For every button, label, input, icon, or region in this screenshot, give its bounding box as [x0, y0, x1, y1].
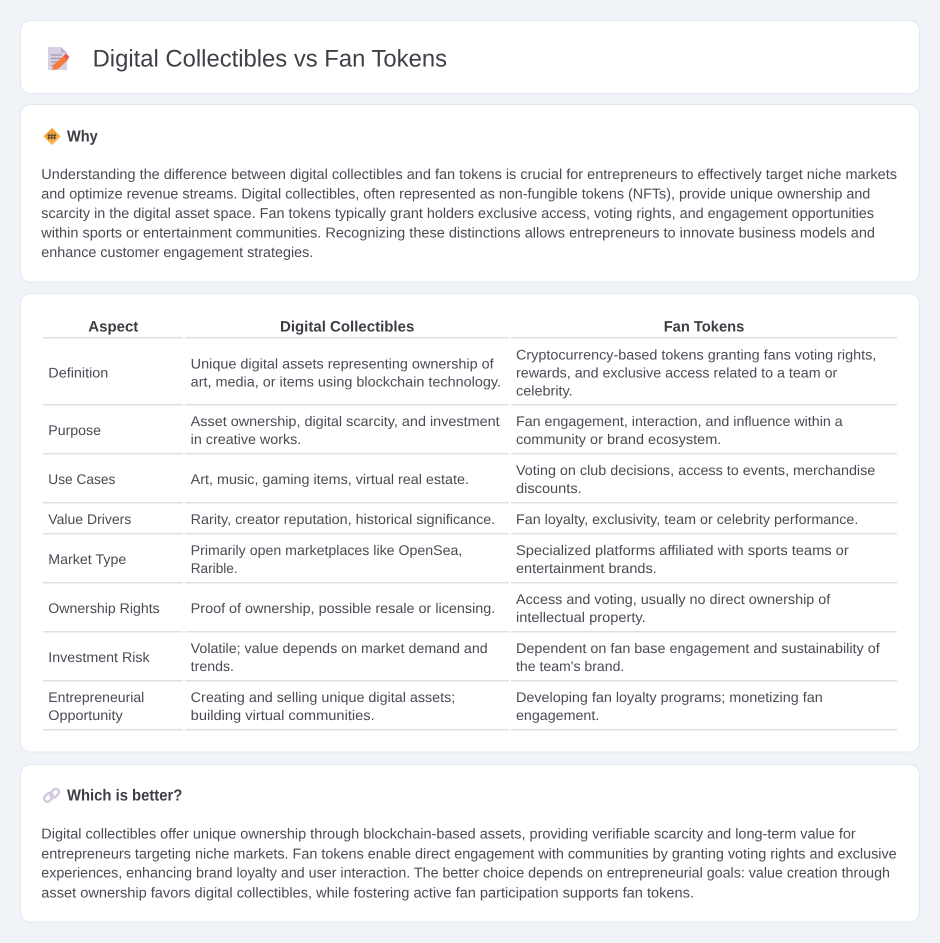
- row: market type: Rarible.: [191, 560, 238, 576]
- row: use cases: [43, 462, 897, 504]
- row: market type: entertainment brands.: [516, 560, 657, 576]
- row: market type: Primarily open marketplaces like OpenSea,: [191, 542, 462, 558]
- row: investment risk: Investment Risk: [48, 649, 151, 665]
- row: market type: Market Type: [48, 551, 127, 567]
- panel: header: [20, 20, 920, 94]
- text block: which is better paragraph: Digital collectibles offer unique ownership through blockchain-based assets, providing verifiable scarcity and long-term value for: [41, 826, 856, 842]
- row: use cases: Voting on club decisions, access to events, merchandise: [516, 462, 876, 478]
- row: ownership rights: Proof of ownership, possible resale or licensing.: [191, 600, 495, 616]
- row: definition: Definition: [48, 364, 108, 380]
- panel: which is better: [20, 764, 920, 922]
- text block: why paragraph: [40, 167, 897, 261]
- row: purpose: [43, 413, 897, 454]
- row: purpose: Asset ownership, digital scarcity, and investment: [191, 413, 500, 429]
- row: entrepreneurial opportunity: Developing fan loyalty programs; monetizing fan: [516, 689, 823, 705]
- row: purpose: in creative works.: [191, 431, 301, 447]
- panel: why: [20, 104, 920, 282]
- row: investment risk: Dependent on fan base engagement and sustainability of: [516, 640, 880, 656]
- row: entrepreneurial opportunity: building virtual communities.: [191, 707, 375, 723]
- row: market type: [43, 542, 897, 584]
- row: ownership rights: Access and voting, usually no direct ownership of: [516, 591, 830, 607]
- panel: comparison table: [20, 294, 920, 752]
- icon: chain link: [43, 787, 60, 803]
- row: definition: rewards, and exclusive access related to a team or: [516, 364, 838, 380]
- heading: why: Why: [67, 129, 98, 146]
- row: definition: Unique digital assets representing ownership of: [191, 355, 494, 371]
- row: entrepreneurial opportunity: Opportunity: [48, 707, 123, 723]
- text block: why paragraph: and optimize revenue streams. Digital collectibles, often represented as non-fungible tokens (NFTs), provide unique ownership and: [41, 186, 870, 202]
- row: ownership rights: [43, 591, 897, 632]
- row: definition: Cryptocurrency-based tokens granting fans voting rights,: [516, 346, 876, 362]
- row: use cases: Use Cases: [48, 471, 115, 487]
- row: purpose: Purpose: [48, 422, 101, 438]
- text block: which is better paragraph: entrepreneurs targeting niche markets. Fan tokens enable direct engagement with communities by granting voting rights and exclusive: [41, 846, 897, 862]
- row: investment risk: the team's brand.: [516, 658, 624, 674]
- row: ownership rights: Ownership Rights: [48, 600, 160, 616]
- icon: document with pencil: [48, 47, 70, 70]
- row: value drivers: Value Drivers: [48, 511, 131, 527]
- table header: Fan Tokens: [664, 319, 744, 336]
- row: investment risk: trends.: [191, 658, 234, 674]
- row: entrepreneurial opportunity: engagement.: [516, 707, 599, 723]
- row: value drivers: Rarity, creator reputation, historical significance.: [191, 511, 495, 527]
- row: entrepreneurial opportunity: [43, 689, 897, 730]
- row: purpose: Fan engagement, interaction, and influence within a: [516, 413, 843, 429]
- row: use cases: discounts.: [516, 480, 582, 496]
- row: value drivers: Fan loyalty, exclusivity, team or celebrity performance.: [516, 511, 858, 527]
- row: investment risk: [43, 640, 897, 682]
- row: investment risk: Volatile; value depends on market demand and: [191, 640, 488, 656]
- row: use cases: Art, music, gaming items, virtual real estate.: [191, 471, 469, 487]
- row: market type: Specialized platforms affiliated with sports teams or: [516, 542, 849, 558]
- row: purpose: community or brand ecosystem.: [516, 431, 721, 447]
- text block: which is better paragraph: experiences, enhancing brand loyalty and user interaction. The better choice depends on entrepreneurial goals: value creation through: [41, 866, 890, 882]
- row: definition: [43, 346, 897, 406]
- row: ownership rights: intellectual property.: [516, 609, 646, 625]
- text block: why paragraph: enhance customer engagement strategies.: [41, 245, 313, 261]
- text block: why paragraph: scarcity in the digital asset space. Fan tokens typically grant holders exclusive access, voting rights, and engagement opportunities: [41, 206, 874, 222]
- table header: Digital Collectibles: [280, 319, 414, 336]
- text block: why paragraph: Understanding the difference between digital collectibles and fan tokens is crucial for entrepreneurs to effectively target niche markets: [41, 167, 897, 183]
- row: entrepreneurial opportunity: Entrepreneurial: [48, 689, 144, 705]
- row: definition: art, media, or items using blockchain technology.: [191, 373, 501, 389]
- row: definition: celebrity.: [516, 382, 573, 398]
- table header: Aspect: [88, 319, 138, 336]
- text block: why paragraph: within sports or entertainment communities. Recognizing these distinctions allows entrepreneurs to innovate business models and: [40, 226, 875, 242]
- heading: which is better: Which is better?: [67, 788, 182, 805]
- title: Digital Collectibles vs Fan Tokens: [93, 46, 447, 73]
- text block: which is better paragraph: [41, 826, 897, 901]
- icon: orange diamond sign: [44, 128, 60, 145]
- row: value drivers: [43, 511, 897, 534]
- text block: which is better paragraph: asset ownership favors digital collectibles, while fostering active fan participation supports fan tokens.: [41, 885, 694, 901]
- row: entrepreneurial opportunity: Creating and selling unique digital assets;: [191, 689, 455, 705]
- table header: [43, 319, 897, 338]
